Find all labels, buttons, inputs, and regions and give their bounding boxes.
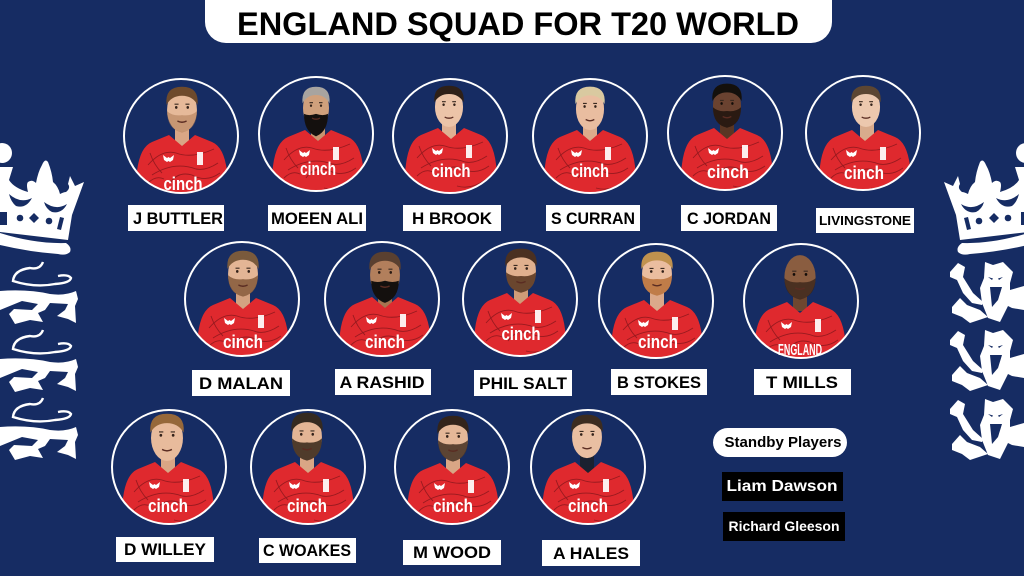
player: Moeen Ali [259,77,373,231]
name label: M WOOD [413,543,491,562]
portrait [123,78,239,194]
portrait [258,76,374,192]
name label [754,369,851,395]
name label: C WOAKES [263,541,351,560]
name label: LIVINGSTONE [819,213,911,228]
portrait: cinch [707,162,749,182]
portrait: cinch [638,332,678,352]
name label: T MILLS [766,373,838,392]
name label [335,369,431,395]
portrait [111,409,227,525]
name label [681,205,777,231]
name label: H BROOK [412,209,493,228]
crest: right [944,143,1024,460]
player: Livingstone [806,76,920,233]
portrait [393,79,507,208]
standby players heading [713,428,847,457]
standby players heading: Standby Players [724,434,842,451]
player: C Woakes [251,410,365,563]
name label: D MALAN [199,374,283,393]
name label: D WILLEY [124,540,207,559]
standby: Richard Gleeson: Richard Gleeson [728,518,840,534]
name label: C JORDAN [687,209,771,228]
portrait [533,79,647,210]
player: D Willey [112,410,226,562]
standby: Richard Gleeson [723,512,845,541]
name label [268,205,366,231]
name label: B STOKES [617,373,701,392]
portrait: cinch [844,163,884,183]
standby: Liam Dawson: Liam Dawson [726,478,838,495]
portrait: cinch [164,174,202,194]
portrait [598,243,714,359]
player: M Wood [395,410,509,565]
portrait: cinch [300,159,336,179]
name label: PHIL SALT [479,374,568,393]
portrait [743,243,859,359]
name label [403,205,501,231]
player: A Hales [531,410,645,566]
portrait: cinch [365,332,405,352]
name label [116,537,214,562]
portrait: cinch [432,161,470,181]
standby: Liam Dawson [722,472,843,501]
title: ENGLAND SQUAD FOR T20 WORLD [237,6,799,42]
name label: A HALES [553,544,629,563]
name label: J BUTTLER [133,209,223,228]
crest: left [0,143,84,460]
portrait [250,409,366,525]
portrait: cinch [502,324,540,344]
portrait [805,75,921,191]
portrait [463,242,577,373]
player: A Rashid [325,242,439,395]
name label: S CURRAN [551,209,635,228]
portrait [667,75,783,191]
name label [542,540,640,566]
player: T Mills [744,244,858,395]
player: B Stokes [599,244,713,395]
name label: MOEEN ALI [271,209,363,228]
name label [128,205,224,231]
name label [816,208,914,233]
portrait: ENGLAND [778,342,822,359]
player: C Jordan [668,76,782,231]
portrait [184,241,300,357]
player: J Buttler [124,79,238,231]
name label [474,370,572,396]
portrait: cinch [223,332,263,352]
player: Phil Salt [463,242,577,396]
portrait [530,409,646,525]
name label: A RASHID [340,373,424,392]
player: S Curran [533,79,647,231]
portrait [324,241,440,357]
name label [403,540,501,565]
name label [546,205,640,231]
player: H Brook [393,79,507,231]
player: D Malan [185,242,299,396]
portrait: cinch [433,496,473,516]
portrait: cinch [568,496,608,516]
portrait: cinch [287,496,327,516]
portrait [394,409,510,525]
portrait: cinch [571,161,609,181]
name label [192,370,290,396]
portrait: cinch [148,496,188,516]
name label [611,369,707,395]
